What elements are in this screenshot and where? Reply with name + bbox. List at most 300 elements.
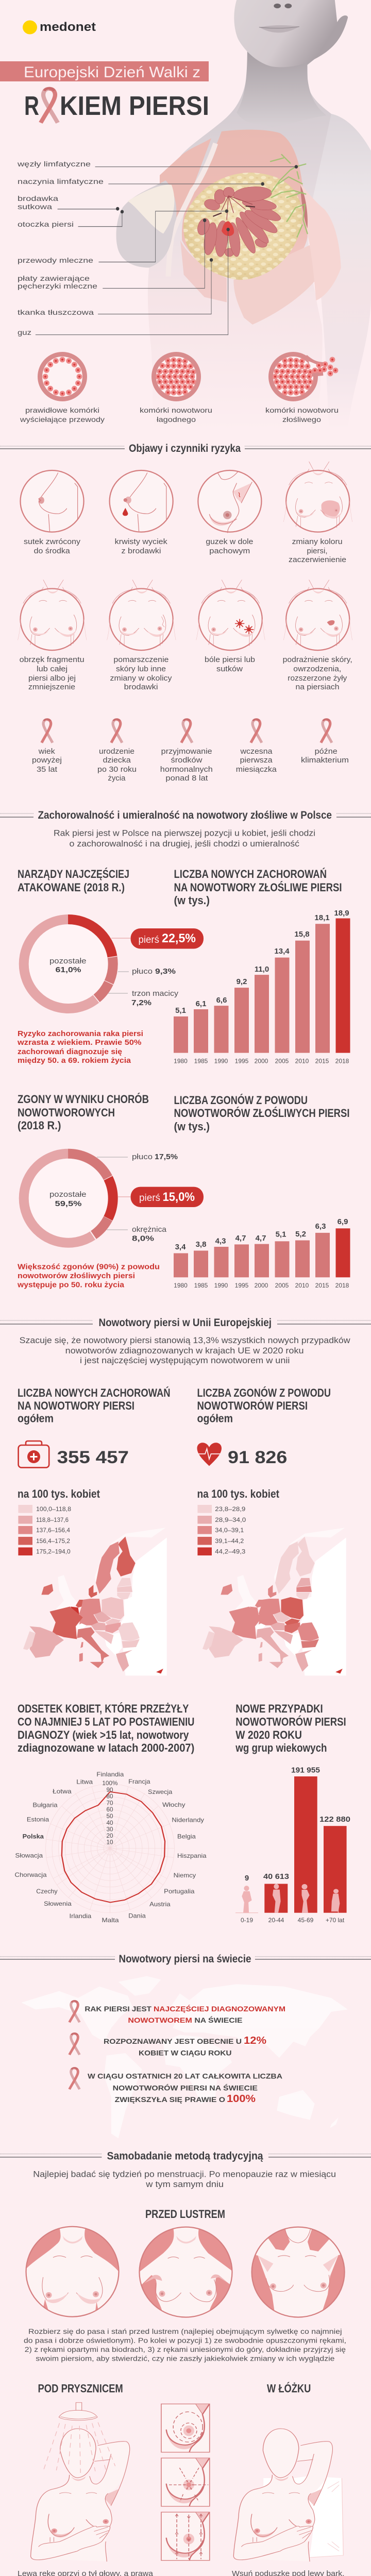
bar chart: deaths: 4,7 xyxy=(235,1234,246,1243)
schema: circular massage xyxy=(161,2404,210,2452)
risk factor captions: po 30 roku xyxy=(97,765,137,774)
heading: new cases xyxy=(174,868,342,907)
anatomy labels: przewody mleczne xyxy=(18,256,93,264)
symptom captions: pomarszczenie xyxy=(113,655,168,664)
intro text: UE: nowotworów zdiagnozowanych w krajach UE w 2020 roku xyxy=(65,1346,303,1355)
heading: survival: zdiagnozowane w latach 2000-2007) xyxy=(18,1741,194,1754)
bar chart: deaths: 6,3 xyxy=(315,1222,326,1231)
bar chart: deaths xyxy=(174,1217,350,1289)
torso xyxy=(116,63,331,429)
bar chart: deaths: 1990 xyxy=(214,1282,228,1289)
radar chart: survival: Austria xyxy=(149,1901,171,1908)
bar chart: deaths: 3,8 xyxy=(196,1240,206,1249)
symptom captions: bóle piersi lub xyxy=(205,655,255,664)
bar chart: deaths: 4,7 xyxy=(256,1234,266,1243)
anatomy labels: tkanka tłuszczowa xyxy=(18,308,94,316)
mirror position 1 xyxy=(24,2224,121,2320)
schema: vertical massage xyxy=(161,2512,210,2561)
title: rakiem piersi: PIERSI xyxy=(129,91,209,121)
symptom captions: zmniejszenie xyxy=(28,683,75,691)
callout: pierś 22,5%: pierś xyxy=(138,935,159,945)
icon: medical case xyxy=(19,1441,49,1468)
text: before mirror xyxy=(24,2327,346,2363)
bar chart: new cases: 2015 xyxy=(315,1058,329,1065)
symptom: bloody discharge xyxy=(110,470,173,532)
radar chart: survival: 10 xyxy=(106,1838,113,1845)
intro text: Polska: Rak piersi jest w Polsce na pierwszej pozycji u kobiet, jeśli chodzi xyxy=(54,828,315,838)
intro text: UE xyxy=(20,1335,350,1365)
cell captions: wyściełające przewody xyxy=(20,415,105,423)
radar chart: survival: Litwa xyxy=(76,1778,93,1785)
legend: incidence xyxy=(18,1487,100,1555)
symptom: wrinkling xyxy=(107,580,176,650)
bar chart: deaths: 1985 xyxy=(194,1282,208,1289)
radar chart: survival: Szwecja xyxy=(148,1788,173,1795)
bar chart: age groups: 191 955 xyxy=(291,1766,320,1775)
world facts: KOBIET W CIĄGU ROKU xyxy=(139,2049,232,2057)
radar chart: survival: Irlandia xyxy=(69,1912,92,1920)
bar chart: age groups: 122 880 xyxy=(319,1815,350,1824)
bar chart: deaths: 2005 xyxy=(275,1282,289,1289)
heading: age groups: wg grup wiekowych xyxy=(235,1741,327,1754)
world facts: 100% xyxy=(227,2093,256,2105)
heading: new cases: (w tys.) xyxy=(174,894,210,907)
intro text: samobadanie: Najlepiej badać się tydzień po menstruacji. Po menopauzie raz w miesiącu xyxy=(33,2169,336,2179)
donut chart: mortality: 59,5% xyxy=(55,1199,81,1208)
heading: new EU cases: NA NOWOTWORY PIERSI xyxy=(18,1399,134,1412)
anatomy labels: sutkowa xyxy=(18,202,52,211)
symptom captions: lub całej xyxy=(37,665,68,673)
diagram: normal cells xyxy=(40,354,85,399)
bar chart: age groups: 9 xyxy=(245,1874,249,1883)
bar chart: new cases: 1980 xyxy=(174,1058,188,1065)
radar chart: survival: Niderlandy xyxy=(172,1816,204,1823)
anatomy labels xyxy=(17,160,104,336)
intro text: samobadanie xyxy=(33,2169,336,2189)
radar chart: survival: Portugalia xyxy=(164,1888,195,1895)
breast interior: fat and lobes xyxy=(183,155,308,280)
illustration: shower xyxy=(31,2402,130,2562)
world facts: ZWIĘKSZYŁA SIĘ PRAWIE O xyxy=(115,2096,225,2104)
symptom: skin irritation xyxy=(283,580,352,650)
legend: mortality: 39,1–44,2 xyxy=(215,1537,244,1545)
legend: mortality: 34,0–39,1 xyxy=(215,1527,244,1534)
schema: radial massage xyxy=(161,2458,210,2506)
map right: mortality xyxy=(203,1528,346,1675)
radar chart: survival: Hiszpania xyxy=(177,1852,207,1859)
number: 355 457: 355 457 xyxy=(57,1448,129,1467)
callout: pierś 15,0%: pierś xyxy=(139,1193,160,1204)
icon: ribbon 3 xyxy=(70,2068,79,2089)
heading: new cases: LICZBA NOWYCH ZACHOROWAŃ xyxy=(174,868,327,880)
heading: w łóżku: W ŁÓŻKU xyxy=(267,2382,311,2395)
facial features xyxy=(259,4,299,32)
legend: mortality: 44,2–49,3 xyxy=(215,1548,246,1555)
risk factor captions: klimakterium xyxy=(301,756,349,765)
callout: pierś 15,0% xyxy=(131,1187,204,1207)
donut labels: incidence: 9,3% xyxy=(155,967,176,976)
heading: organs attacked: ATAKOWANE (2018 R.) xyxy=(18,881,125,894)
symptom captions: owrzodzenia, xyxy=(293,665,341,673)
section heading: świat: Nowotwory piersi na świecie xyxy=(119,1953,251,1965)
risk factor captions: pierwsza xyxy=(240,756,273,765)
intro text: Polska xyxy=(54,828,315,849)
heading: przed lustrem: PRZED LUSTREM xyxy=(145,2208,225,2221)
donut chart: incidence: pozostałe xyxy=(49,957,87,965)
mirror position 3 xyxy=(248,2227,348,2320)
red note: mortality: Większość zgonów (90%) z powodu xyxy=(18,1263,160,1272)
icon: ribbon 2 xyxy=(70,2033,79,2055)
heading: EU deaths: ogółem xyxy=(197,1412,233,1425)
tumour xyxy=(222,221,234,236)
radar chart: survival: Estonia xyxy=(27,1816,49,1823)
symptom captions: piersi albo jej xyxy=(28,674,76,683)
risk factor captions: 35 lat xyxy=(37,765,58,774)
donut chart: incidence: 61,0% xyxy=(56,965,81,974)
symptom captions: piersi, xyxy=(307,547,328,555)
legend: incidence: 137,6–156,4 xyxy=(36,1527,70,1534)
risk factor captions: późne xyxy=(315,747,338,756)
symptom captions: sutków xyxy=(216,665,243,673)
bar chart: age groups: 0-19 xyxy=(241,1917,253,1924)
radar chart: survival: 80 xyxy=(106,1793,113,1800)
symptom: pain xyxy=(196,580,265,650)
world facts: NAJCZĘŚCIEJ DIAGNOZOWANYM xyxy=(154,2005,285,2013)
text: before mirror: swoim piersiom, aby stwierdzić, czy nie zaszły jakiekolwiek zmiany w ich wyglądzie xyxy=(36,2354,335,2363)
mirror position 2 xyxy=(139,2224,233,2320)
bar chart: new cases: 18,1 xyxy=(314,913,330,922)
symptom captions: na piersiach xyxy=(296,683,339,691)
cell captions: komórki nowotworu xyxy=(140,406,212,414)
heading: survival: ODSETEK KOBIET, KTÓRE PRZEŻYŁY xyxy=(18,1702,189,1715)
radar chart: survival: 50 xyxy=(106,1812,113,1820)
callout: pierś 22,5% xyxy=(131,928,204,949)
section heading: Unia Europejska: Nowotwory piersi w Unii Europejskiej xyxy=(99,1317,272,1329)
diagram: malignant cells xyxy=(271,354,338,399)
symptom captions: zmiany w okolicy xyxy=(110,674,172,683)
cell captions: łagodnego xyxy=(157,415,196,423)
heading: age groups: NOWOTWORÓW PIERSI xyxy=(235,1715,346,1728)
radar chart: survival: 70 xyxy=(106,1799,113,1806)
risk factor captions: wczesna xyxy=(240,747,273,756)
bar chart: new cases: 6,6 xyxy=(216,996,227,1005)
red note: incidence: zachorowań diagnozuje się xyxy=(18,1047,122,1056)
risk factor captions: urodzenie xyxy=(99,747,134,756)
bar chart: new cases: 2000 xyxy=(255,1058,268,1065)
intro text: samobadanie: w tym samym dniu xyxy=(145,2179,224,2189)
logo: medonet: medonet xyxy=(40,20,96,34)
donut chart: mortality: pozostałe xyxy=(49,1190,87,1199)
world facts xyxy=(70,2001,285,2105)
icon: heart with pulse xyxy=(197,1443,222,1466)
text: before mirror: Rozbierz się do pasa i stań przed lustrem (najlepiej obejmującym sylwetkę co najmniej xyxy=(28,2327,342,2335)
bar chart: new cases: 2018 xyxy=(335,1058,349,1065)
intro text: UE: i jest najczęściej występującym nowotworem w unii xyxy=(80,1355,290,1365)
anatomy labels: węzły limfatyczne xyxy=(17,160,91,168)
symptom captions: krwisty wyciek xyxy=(115,537,167,546)
bar chart: deaths: 3,4 xyxy=(175,1243,186,1251)
symptom captions: pachowym xyxy=(209,547,250,555)
milk ducts xyxy=(222,196,252,220)
heading: EU deaths: LICZBA ZGONÓW Z POWODU xyxy=(197,1386,331,1399)
map left: incidence xyxy=(23,1528,167,1675)
bar chart: new cases xyxy=(174,909,350,1065)
title banner: Europejski Dzień Walki z xyxy=(24,64,200,81)
cell captions: komórki nowotworu xyxy=(265,406,339,414)
section heading: samobadanie: Samobadanie metodą tradycyjną xyxy=(107,2150,263,2162)
risk factor captions: miesiączka xyxy=(236,765,277,774)
bar chart: new cases: 5,1 xyxy=(175,1006,186,1015)
heading: new cases: NA NOWOTWORY ZŁOŚLIWE PIERSI xyxy=(174,881,342,894)
text: before mirror: do pasa i dobrze oświetlonym). Po kolei w pozycji 1) ze swobodnie opuszczonymi rękami, xyxy=(24,2336,346,2345)
heading: EU deaths: NOWOTWORÓW PIERSI xyxy=(197,1399,308,1412)
risk factor captions: środków xyxy=(171,756,203,765)
heading: new EU cases: ogółem xyxy=(18,1412,54,1425)
symptom captions: guzek w dole xyxy=(206,537,253,546)
radar chart: survival: Czechy xyxy=(36,1888,58,1895)
heading: age groups: NOWE PRZYPADKI xyxy=(235,1702,323,1715)
heading: EU deaths xyxy=(197,1386,331,1425)
heading: deaths: NOWOTWOROWYCH xyxy=(18,1106,115,1119)
red note: mortality xyxy=(17,1263,160,1290)
world facts: RAK PIERSI JEST xyxy=(85,2005,152,2013)
legend: incidence: 156,4–175,2 xyxy=(36,1537,70,1545)
radar chart: survival: Dania xyxy=(128,1912,146,1920)
bar chart: new cases: 9,2 xyxy=(237,977,247,986)
bar chart: age groups: 45-69 xyxy=(298,1917,314,1924)
cell captions xyxy=(20,406,339,423)
symptom: swelling xyxy=(18,580,87,650)
radar chart: survival xyxy=(14,1771,207,1924)
symptom captions: sutek zwrócony xyxy=(24,537,81,546)
legend: incidence: 100,0–118,8 xyxy=(36,1505,71,1513)
radar chart: survival: Chorwacja xyxy=(14,1871,47,1878)
red note: mortality: nowotworów złośliwych piersi xyxy=(18,1272,135,1280)
bar chart: deaths: 2000 xyxy=(255,1282,268,1289)
heading: survival: DIAGNOZY (wiek >15 lat, nowotwory xyxy=(18,1728,189,1741)
bar chart: deaths: 5,1 xyxy=(276,1230,286,1239)
section heading: Objawy i czynniki ryzyka: Objawy i czynniki ryzyka xyxy=(129,443,241,454)
symptom captions: z brodawki xyxy=(122,547,161,555)
heading: number of deaths: LICZBA ZGONÓW Z POWODU xyxy=(174,1094,308,1107)
radar chart: survival: Malta xyxy=(102,1917,119,1924)
risk factor captions: wiek xyxy=(38,747,55,756)
lymph vessels xyxy=(271,155,308,237)
world facts: NOWOTWOREM xyxy=(128,2016,192,2024)
radar chart: survival: 60 xyxy=(106,1806,113,1813)
heading: deaths: ZGONY W WYNIKU CHORÓB xyxy=(18,1093,149,1106)
bar chart: new cases: 13,4 xyxy=(274,947,290,956)
icon: ribbon 1 xyxy=(70,2001,79,2022)
heading: new EU cases xyxy=(18,1386,171,1425)
symptom captions: brodawki xyxy=(124,683,158,691)
risk factor captions: życia xyxy=(108,774,126,783)
diagram: benign cells xyxy=(154,354,199,399)
world facts: NOWOTWORÓW PIERSI NA ŚWIECIE xyxy=(113,2084,258,2092)
symptom captions: rozszerzone żyły xyxy=(288,674,347,683)
callout: pierś 22,5%: 22,5% xyxy=(162,931,196,945)
anatomy labels: pęcherzyki mleczne xyxy=(18,282,97,290)
symptom captions: skóry lub inne xyxy=(116,665,166,673)
legend: mortality: na 100 tys. kobiet xyxy=(197,1487,280,1500)
risk factor captions: powyżej xyxy=(32,756,62,765)
heading: deaths xyxy=(18,1093,149,1132)
donut labels: mortality xyxy=(132,1153,178,1243)
radar chart: survival: Łotwa xyxy=(53,1788,72,1795)
face xyxy=(234,0,348,67)
cell captions: złośliwego xyxy=(282,415,321,423)
bar chart: deaths: 4,3 xyxy=(215,1237,226,1246)
radar chart: survival: Finlandia xyxy=(96,1771,124,1778)
section heading: Zachorowalność: Zachorowalność i umieralność na nowotwory złośliwe w Polsce xyxy=(38,809,332,821)
symptom captions: do środka xyxy=(34,547,70,555)
muscles xyxy=(160,130,341,325)
title: rakiem piersi: KIEM xyxy=(60,91,122,121)
world facts: W CIĄGU OSTATNICH 20 LAT CAŁKOWITA LICZBA xyxy=(88,2073,282,2080)
bar chart: deaths: 2018 xyxy=(335,1282,349,1289)
callout: pierś 15,0%: 15,0% xyxy=(163,1190,195,1204)
symptom captions: zaczerwienienie xyxy=(289,555,346,564)
red note: incidence: wzrasta z wiekiem. Prawie 50% xyxy=(17,1038,141,1047)
legend: mortality xyxy=(197,1487,280,1555)
bar chart: new cases: 18,9 xyxy=(334,909,349,918)
legend: mortality: 28,9–34,0 xyxy=(215,1516,246,1523)
donut chart: mortality xyxy=(24,1154,130,1243)
bar chart: new cases: 2010 xyxy=(295,1058,309,1065)
bar chart: deaths: 1995 xyxy=(235,1282,249,1289)
bar chart: age groups: +70 lat xyxy=(326,1917,345,1924)
cell captions: prawidłowe komórki xyxy=(25,406,99,414)
heading: new EU cases: LICZBA NOWYCH ZACHOROWAŃ xyxy=(18,1386,171,1399)
bar chart: new cases: 11,0 xyxy=(255,965,269,974)
arm xyxy=(305,114,371,429)
anatomy labels: otoczka piersi xyxy=(18,220,74,228)
donut labels: mortality: 8,0% xyxy=(132,1234,154,1243)
heading: number of deaths: (w tys.) xyxy=(174,1120,210,1133)
red note: incidence xyxy=(17,1029,143,1065)
radar chart: survival: 90 xyxy=(106,1786,113,1793)
radar chart: survival: Belgia xyxy=(177,1833,196,1840)
anatomy labels: guz xyxy=(18,328,31,336)
heading: survival xyxy=(18,1702,194,1754)
radar chart: survival: 30 xyxy=(106,1826,113,1833)
bar chart: deaths: 1980 xyxy=(174,1282,188,1289)
logo: medonet xyxy=(23,20,96,34)
radar chart: survival: Bułgaria xyxy=(32,1801,58,1808)
bar chart: new cases: 1990 xyxy=(214,1058,228,1065)
bar chart: new cases: 2005 xyxy=(275,1058,289,1065)
heading: age groups: W 2020 ROKU xyxy=(235,1728,302,1741)
left breast xyxy=(116,180,177,267)
heading: survival: CO NAJMNIEJ 5 LAT PO POSTAWIENIU xyxy=(18,1715,194,1728)
legend: mortality: 23,8–28,9 xyxy=(215,1505,246,1513)
radar chart: survival: 20 xyxy=(106,1832,113,1839)
donut labels: incidence: płuco xyxy=(132,967,153,976)
donut labels: mortality: okrężnica xyxy=(132,1225,167,1234)
bar chart: age groups xyxy=(235,1766,350,1924)
radar chart: survival: Francja xyxy=(128,1778,150,1785)
anatomy labels: brodawka xyxy=(18,194,58,202)
illustration: in bed xyxy=(233,2429,343,2562)
symptom: colour change xyxy=(283,462,352,532)
bar chart: new cases: 6,1 xyxy=(196,999,206,1008)
red note: mortality: występuje po 50. roku życia xyxy=(17,1281,125,1290)
symptom captions xyxy=(20,537,352,691)
world map background xyxy=(21,1976,348,2138)
risk factor captions: hormonalnych xyxy=(160,765,213,774)
risk factor ribbons xyxy=(42,719,332,743)
bar chart: deaths: 2010 xyxy=(295,1282,309,1289)
heading: deaths: (2018 R.) xyxy=(18,1119,61,1132)
red note: incidence: Ryzyko zachorowania raka piersi xyxy=(18,1029,143,1038)
bar chart: age groups: 20-44 xyxy=(268,1917,284,1924)
text: before mirror: 2) z rękami opartymi na biodrach, 3) z rękami uniesionymi do góry, dokładnie przyjrzyj się xyxy=(25,2345,346,2353)
bar chart: deaths: 6,9 xyxy=(338,1217,348,1226)
title: rakiem piersi xyxy=(24,88,209,123)
symptom: nipple turned inward xyxy=(20,470,84,532)
intro text: UE: Szacuje się, że nowotwory piersi stanowią 13,3% wszystkich nowych przypadków xyxy=(20,1335,350,1345)
bar chart: deaths: 5,2 xyxy=(295,1230,306,1239)
bar chart: deaths: 2015 xyxy=(315,1282,329,1289)
panel: anatomy illustration xyxy=(36,0,371,429)
bar chart: new cases: 15,8 xyxy=(294,930,310,939)
bar chart: new cases: 1995 xyxy=(235,1058,249,1065)
radar chart: survival: Słowacja xyxy=(15,1852,43,1859)
heading: organs attacked: NARZĄDY NAJCZĘŚCIEJ xyxy=(18,868,129,880)
heading: organs attacked xyxy=(18,868,129,894)
radar chart: survival: Polska xyxy=(23,1833,44,1840)
world facts: NA ŚWIECIE xyxy=(194,2016,243,2024)
donut labels: incidence: 7,2% xyxy=(131,998,151,1007)
heading: pod prysznicem: POD PRYSZNICEM xyxy=(38,2382,123,2395)
anatomy labels: płaty zawierające xyxy=(18,274,90,282)
legend: incidence: 175,2–194,0 xyxy=(36,1548,71,1555)
risk factor captions: ponad 8 lat xyxy=(165,774,208,783)
anatomy labels: naczynia limfatyczne xyxy=(18,177,104,185)
red note: incidence: między 50. a 69. rokiem życia xyxy=(18,1056,131,1065)
fat tissue xyxy=(183,173,302,280)
symptom: lump in armpit xyxy=(198,470,261,533)
bar chart: new cases: 1985 xyxy=(194,1058,208,1065)
donut chart: incidence xyxy=(24,919,130,1009)
milk lobes xyxy=(195,185,282,257)
symptom captions: podrażnienie skóry, xyxy=(283,655,352,664)
number: 91 826: 91 826 xyxy=(228,1448,287,1467)
donut labels: incidence: trzon macicy xyxy=(132,989,179,998)
risk factor captions xyxy=(32,747,349,783)
risk factor captions: dziecka xyxy=(103,756,131,765)
donut labels: incidence xyxy=(131,967,179,1007)
callout dots xyxy=(116,165,298,262)
title: rakiem piersi: R xyxy=(24,91,39,121)
donut labels: mortality: 17,5% xyxy=(155,1153,178,1161)
intro text: Polska: o zachorowalność i na drugiej, jeśli chodzi o umieralność xyxy=(69,839,300,849)
radar chart: survival: 100% xyxy=(102,1780,118,1787)
radar chart: survival: Włochy xyxy=(162,1801,185,1808)
bar chart: age groups: 40 613 xyxy=(263,1872,289,1881)
heading: age groups xyxy=(235,1702,346,1754)
heading: number of deaths xyxy=(174,1094,349,1133)
symptom captions: obrzęk fragmentu xyxy=(20,655,85,664)
legend: incidence: 118,8–137,6 xyxy=(36,1516,69,1523)
radar chart: survival: Słowenia xyxy=(44,1900,72,1907)
legend: incidence: na 100 tys. kobiet xyxy=(18,1487,100,1500)
neck shadow xyxy=(237,50,327,127)
title banner xyxy=(0,61,209,81)
donut labels: mortality: płuco xyxy=(132,1153,153,1161)
radar chart: survival: 40 xyxy=(106,1819,113,1826)
risk factor captions: przyjmowanie xyxy=(161,747,212,756)
